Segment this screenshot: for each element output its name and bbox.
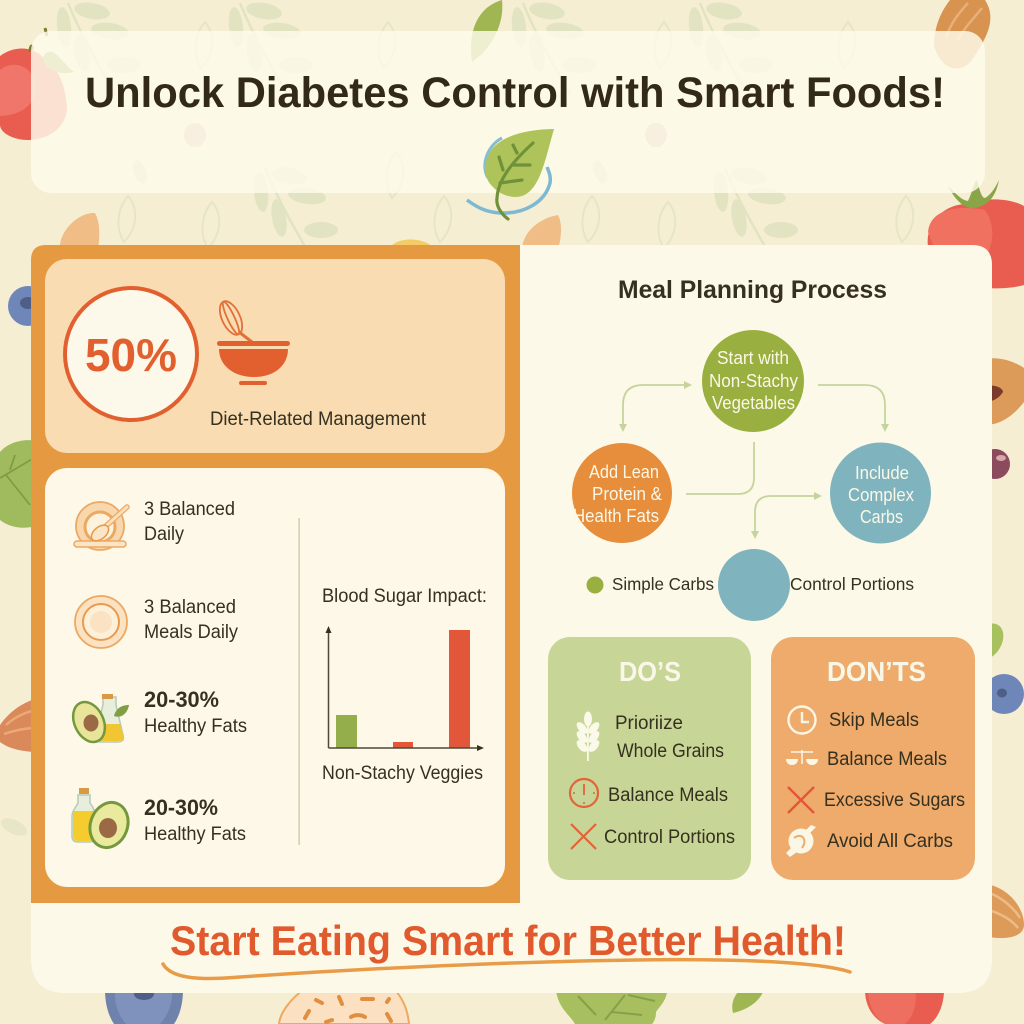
decoration: bottom strawberry xyxy=(865,990,944,1024)
title: Unlock Diabetes Control with Smart Foods! xyxy=(85,69,945,117)
icon: avocado and oil flask xyxy=(67,694,129,747)
guideline text: healthy fats 2: 20-30% xyxy=(144,795,218,820)
underline swoosh xyxy=(163,960,850,979)
icon: oil bottle and avocado xyxy=(72,788,134,853)
background pattern: leaf sprigs xyxy=(0,0,913,839)
call to action: Start Eating Smart for Better Health! xyxy=(170,917,846,964)
decoration: right almond xyxy=(985,358,1024,424)
icon: plate with whisk xyxy=(74,502,127,550)
decoration: right blueberry xyxy=(984,674,1024,714)
flow step: lean protein: Add Lean xyxy=(589,462,659,482)
main white panel xyxy=(31,245,992,993)
guideline text: 3 balanced daily: 3 Balanced xyxy=(144,499,235,520)
decoration: top leaf xyxy=(471,0,502,62)
panel: diet management xyxy=(45,259,505,453)
stat circle xyxy=(65,288,197,420)
flow step: start with vegetables: Start with xyxy=(717,348,789,368)
legend: simple carbs: Simple Carbs xyxy=(612,574,714,594)
left orange panel xyxy=(31,245,520,903)
icon: scales xyxy=(786,750,818,765)
stat circle: 50% xyxy=(85,329,177,381)
decoration: upper almonds xyxy=(60,213,561,250)
guideline text: 3 balanced daily xyxy=(144,499,235,545)
don't text: skip meals: Skip Meals xyxy=(829,710,919,731)
decoration: right strawberry xyxy=(928,180,1024,288)
flow step: start with vegetables: Vegetables xyxy=(712,393,795,413)
decoration: bottom lettuce xyxy=(556,990,667,1024)
icon: clock xyxy=(788,706,816,734)
panel: don'ts xyxy=(771,637,975,880)
icon: wheat xyxy=(575,712,601,761)
decoration: bottom cookie xyxy=(279,990,409,1024)
flow step: complex carbs: Complex xyxy=(848,485,914,505)
decoration: top right almond xyxy=(934,0,990,68)
don't text: balance meals: Balance Meals xyxy=(827,749,947,770)
heading: meal planning process: Meal Planning Process xyxy=(618,276,887,304)
icon: candy xyxy=(786,825,816,857)
legend: control portions: Control Portions xyxy=(790,574,914,594)
icon: plate xyxy=(75,596,127,648)
flow step: start with vegetables xyxy=(702,330,804,432)
icon: cross xyxy=(571,824,596,849)
guideline text: healthy fats 2 xyxy=(144,795,246,845)
flow step: lean protein xyxy=(572,443,672,543)
flow step: lean protein: Protein & xyxy=(592,484,662,504)
chart title: Blood Sugar Impact: xyxy=(322,586,487,607)
do text: balance meals: Balance Meals xyxy=(608,785,728,806)
do text: control portions: Control Portions xyxy=(604,827,735,848)
decoration: bottom leaf xyxy=(732,992,763,1013)
guideline text: healthy fats xyxy=(144,687,247,737)
decoration: left strawberry xyxy=(0,28,74,140)
decoration: left lettuce xyxy=(0,440,40,528)
header panel xyxy=(31,31,985,193)
stat label: Diet-Related Management xyxy=(210,409,427,430)
don't text: excessive sugars: Excessive Sugars xyxy=(824,790,965,811)
bar chart xyxy=(326,626,484,751)
guideline text: healthy fats: Healthy Fats xyxy=(144,716,247,737)
panel: do's xyxy=(548,637,751,880)
flow step: complex carbs: Include xyxy=(855,463,909,483)
decoration: left almond xyxy=(0,698,40,752)
decoration: right leaf xyxy=(985,623,1003,660)
guideline text: 3 balanced meals daily xyxy=(144,597,238,643)
icon: whisk and bowl xyxy=(215,298,290,385)
guideline text: 3 balanced daily: Daily xyxy=(144,524,184,545)
don't text: avoid all carbs: Avoid All Carbs xyxy=(827,831,953,852)
decoration: left blueberry xyxy=(8,286,48,326)
guideline text: 3 balanced meals daily: 3 Balanced xyxy=(144,597,236,618)
decoration: right berry xyxy=(980,449,1010,479)
guideline text: 3 balanced meals daily: Meals Daily xyxy=(144,622,238,643)
chart label: Non-Stachy Veggies xyxy=(322,763,483,784)
decoration: bottom blueberry xyxy=(105,988,183,1024)
do text: whole grains: Whole Grains xyxy=(617,741,724,762)
flow step: portions circle xyxy=(718,549,790,621)
icon: cross xyxy=(788,787,814,813)
flow step: complex carbs: Carbs xyxy=(860,507,903,527)
decoration: lower right almond xyxy=(985,884,1024,938)
guideline text: healthy fats: 20-30% xyxy=(144,687,219,712)
do's heading: DO’S xyxy=(619,656,681,687)
flow step: complex carbs xyxy=(830,442,931,544)
panel: guidelines and chart xyxy=(45,468,505,887)
icon: leaf logo xyxy=(467,129,554,219)
flow step: lean protein: Health Fats xyxy=(573,506,659,526)
flow arrows xyxy=(619,381,889,539)
icon: clock xyxy=(570,779,598,807)
guideline text: healthy fats 2: Healthy Fats xyxy=(144,824,246,845)
do text: whole grains: Prioriize xyxy=(615,713,683,734)
flow step: start with vegetables: Non-Stachy xyxy=(709,371,798,391)
don'ts heading: DON’TS xyxy=(827,656,926,687)
do text: whole grains xyxy=(615,713,724,762)
